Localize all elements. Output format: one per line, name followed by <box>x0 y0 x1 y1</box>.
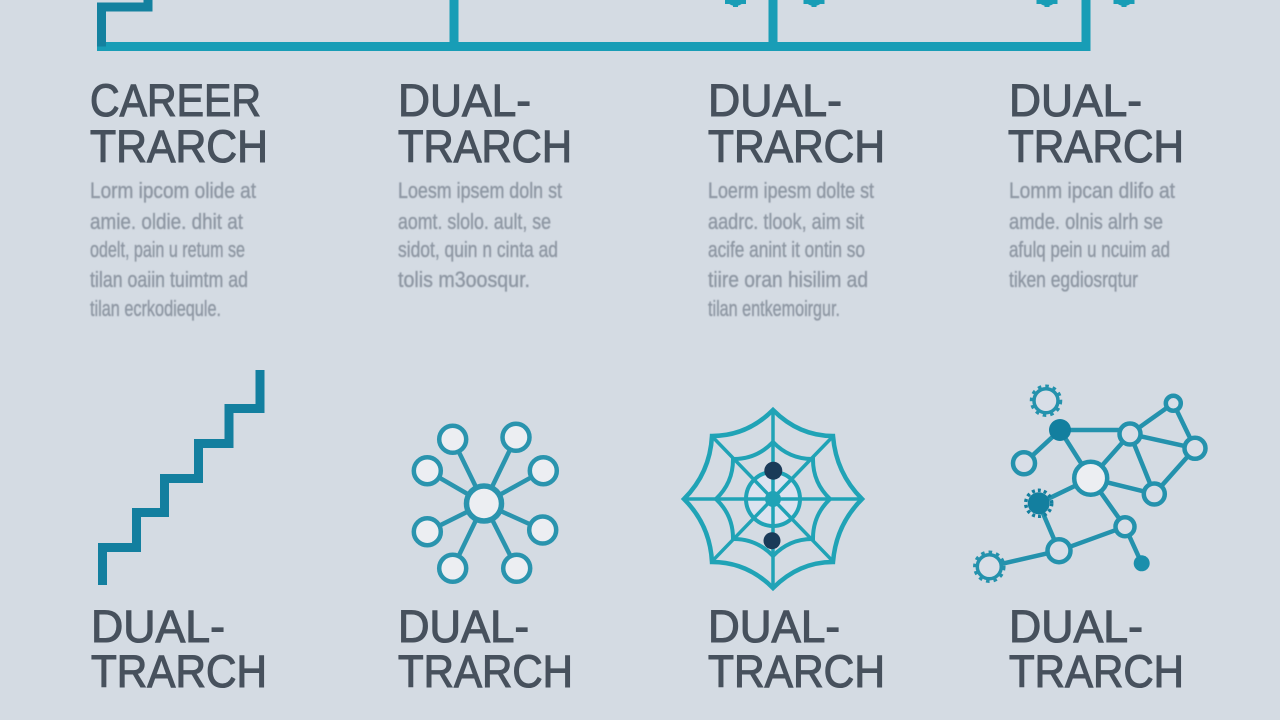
heading: bottom column 1: DUAL- <box>91 601 225 652</box>
web dots <box>764 462 782 549</box>
heading: bottom column 4: DUAL- <box>1009 601 1143 652</box>
body text column 1: odelt, pain u retum se <box>90 237 245 262</box>
heading: career trarch: CAREER <box>90 75 261 126</box>
heading: dual trarch: DUAL- <box>1009 75 1142 126</box>
body text column 1 <box>90 178 256 321</box>
body text column 1: Lorm ipcom olide at <box>90 178 256 203</box>
heading: dual trarch: DUAL- <box>398 75 531 126</box>
body text column 4 <box>1009 178 1175 292</box>
heading: dual trarch <box>398 75 572 172</box>
gear bottom <box>975 552 1004 581</box>
heading: bottom column 3: TRARCH <box>708 646 885 697</box>
body text column 2: sidot, quin n cinta ad <box>398 237 558 262</box>
panel: column 3 description <box>708 75 885 321</box>
heading: bottom column 2: TRARCH <box>398 646 573 697</box>
heading: dual trarch <box>1008 75 1184 172</box>
body text column 2 <box>398 178 562 292</box>
body text column 4: Lomm ipcan dlifo at <box>1009 178 1175 203</box>
gear top <box>1032 386 1060 415</box>
body text column 1: tilan oaiin tuimtm ad <box>90 267 248 292</box>
body text column 1: tilan ecrkodiequle. <box>90 296 221 321</box>
heading: bottom column 3 <box>708 601 885 697</box>
cropped gear icons at top <box>724 0 1135 7</box>
heading: dual trarch: DUAL- <box>708 75 842 126</box>
heading: dual trarch: TRARCH <box>398 121 572 172</box>
icon: hub and spoke network <box>414 424 557 582</box>
body text column 3: tilan entkemoirgur. <box>708 296 840 321</box>
panel: column 4 description <box>1008 75 1184 292</box>
body text column 4: afulq pein u ncuim ad <box>1009 237 1170 262</box>
panel: column 1 description <box>90 75 268 321</box>
dark gear <box>1026 490 1052 516</box>
connector frame with dividers <box>102 0 1086 46</box>
body text column 4: amde. olnis alrh se <box>1009 209 1163 234</box>
body text column 3: aadrc. tlook, aim sit <box>708 209 864 234</box>
heading: bottom column 2: DUAL- <box>398 601 529 652</box>
heading: dual trarch <box>708 75 885 172</box>
body text column 2: Loesm ipsem doln st <box>398 178 562 203</box>
body text column 3: acife anint it ontin so <box>708 237 865 262</box>
heading: bottom column 3: DUAL- <box>708 601 840 652</box>
body text column 2: aomt. slolo. ault, se <box>398 209 551 234</box>
heading: career trarch: TRARCH <box>90 121 268 172</box>
body text column 3: Loerm ipesm dolte st <box>708 178 874 203</box>
heading: dual trarch: TRARCH <box>1008 121 1184 172</box>
panel: column 2 description <box>398 75 572 292</box>
heading: career trarch <box>90 75 268 172</box>
body text column 1: amie. oldie. dhit at <box>90 209 243 234</box>
icon: spider web <box>684 410 862 588</box>
body text column 2: tolis m3oosqur. <box>398 267 530 292</box>
heading: bottom column 2 <box>398 601 573 697</box>
heading: dual trarch: TRARCH <box>708 121 885 172</box>
icon: career staircase <box>102 370 260 585</box>
heading: bottom column 1 <box>91 601 267 697</box>
icon: molecular network with gears <box>975 386 1206 581</box>
heading: bottom column 4: TRARCH <box>1009 646 1184 697</box>
heading: bottom column 4 <box>1009 601 1184 697</box>
body text column 4: tiken egdiosrqtur <box>1009 267 1138 292</box>
body text column 3 <box>708 178 874 321</box>
heading: bottom column 1: TRARCH <box>91 646 267 697</box>
body text column 3: tiire oran hisilim ad <box>708 267 868 292</box>
